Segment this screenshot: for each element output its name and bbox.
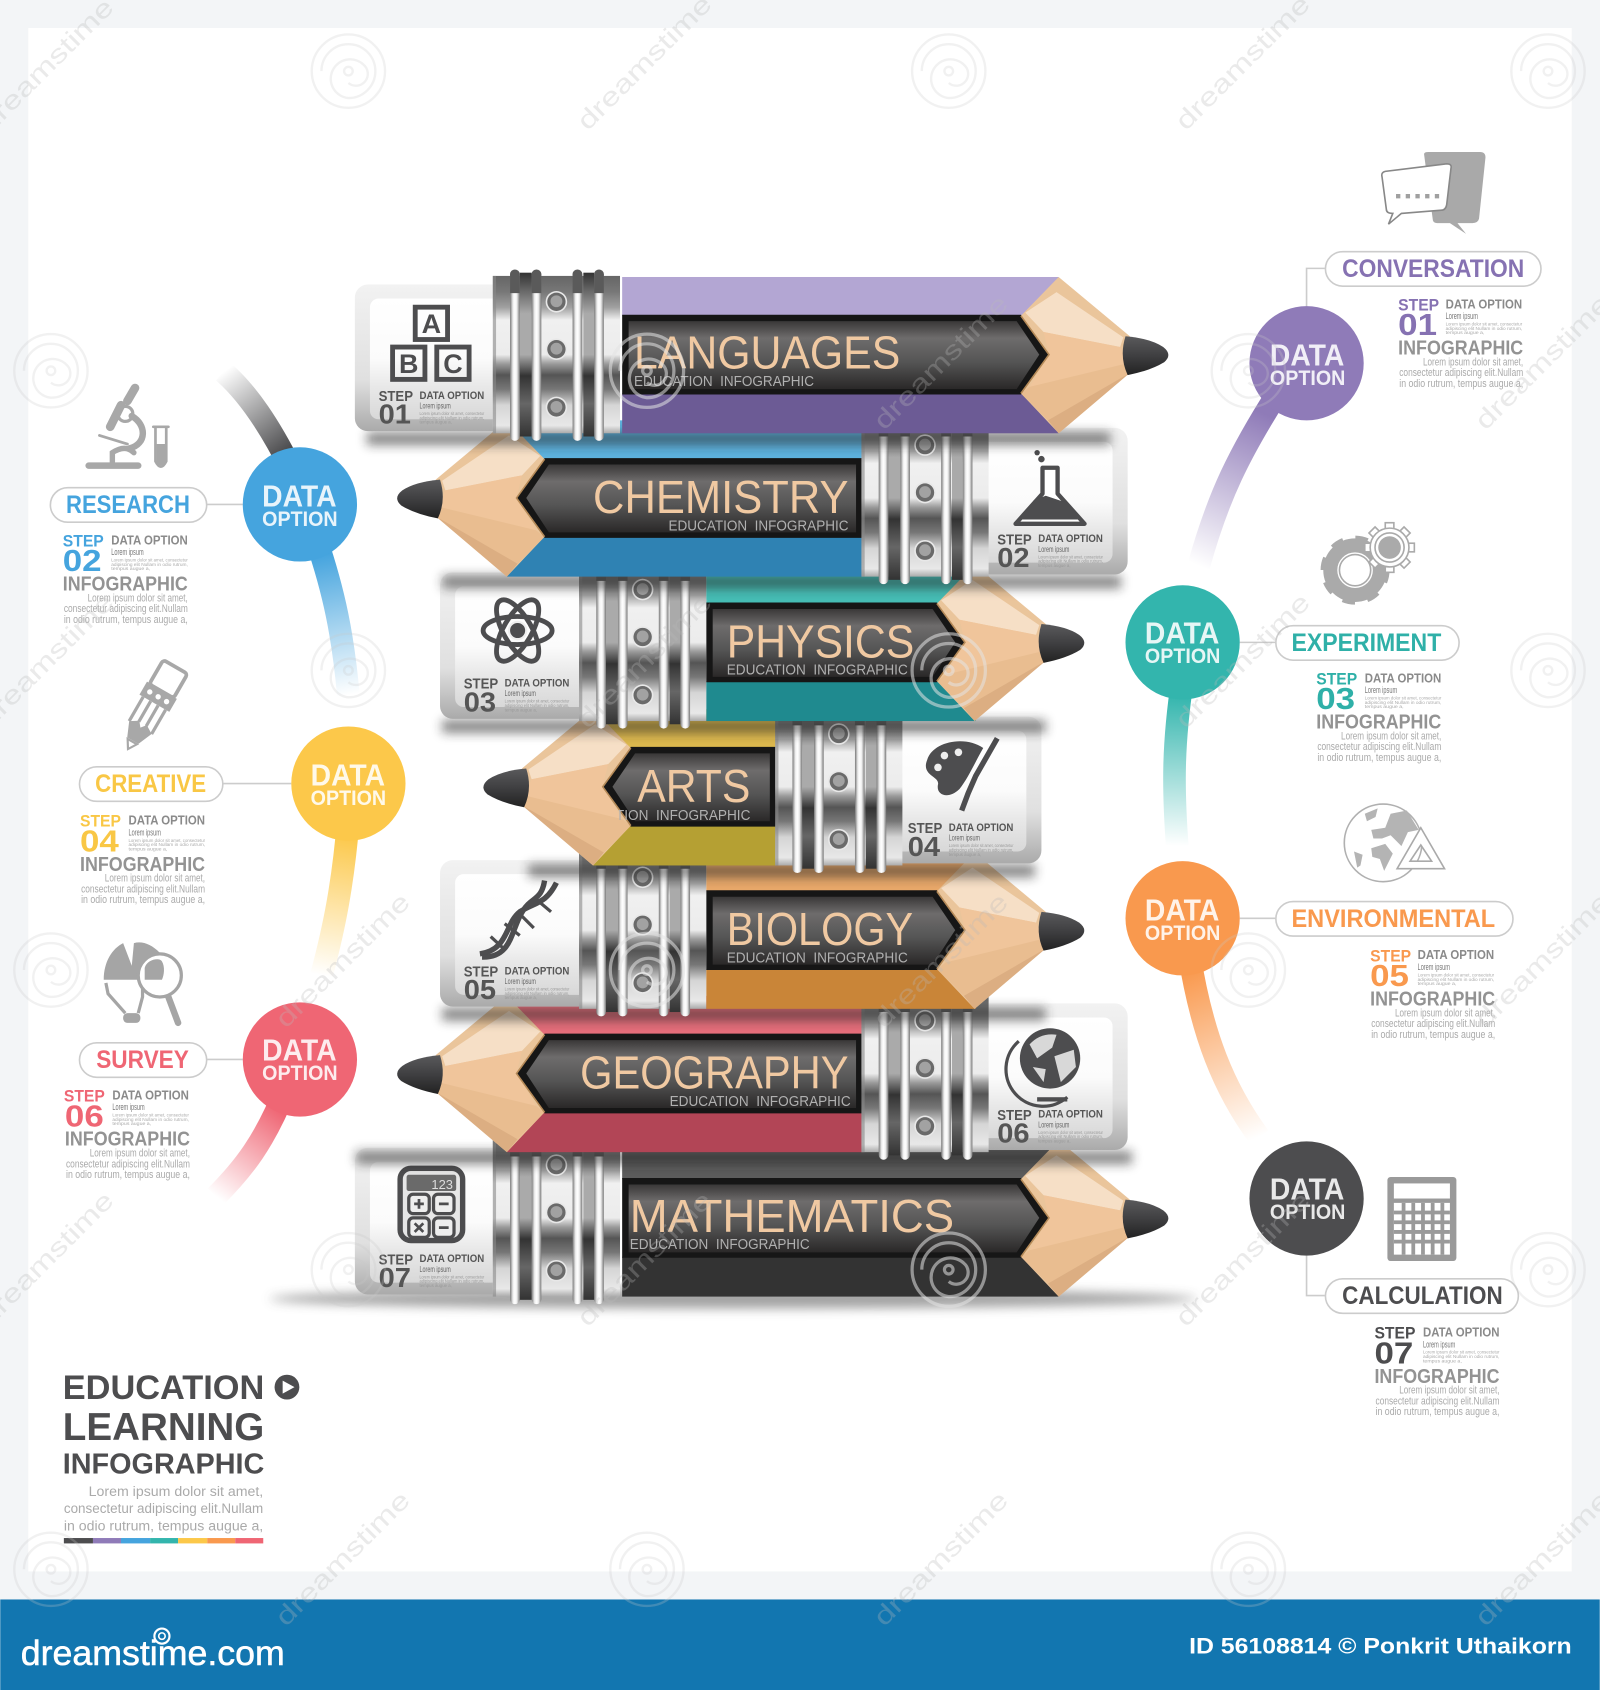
step label 01: 01: [379, 399, 411, 430]
step label 07: 07: [379, 1262, 411, 1293]
callout 02: research: DATA OPTION: [111, 532, 188, 547]
callout 05: environmental: adipiscing elit Nullam in odio rutrum,: [1418, 977, 1494, 983]
icon: pencil: [113, 658, 190, 758]
callout 03: experiment: Lorem ipsum: [1365, 685, 1397, 695]
subtitle: EDUCATION INFOGRAPHIC: [727, 949, 908, 966]
icon: abc blocks: A: [422, 309, 441, 339]
callout 03: experiment: Lorem ipsum dolor sit amet, consectetur: [1365, 695, 1442, 701]
watermark spirals and diagonal marks: dreamstime: [1170, 0, 1316, 136]
callout 02: research: Lorem ipsum dolor sit amet, consectetur: [111, 558, 188, 564]
callout 01: conversation: OPTION: [1270, 365, 1345, 390]
pencil 7: mathematics: [355, 1133, 1168, 1304]
callout 06: survey: SURVEY: [96, 1047, 189, 1074]
subtitle: EDUCATION INFOGRAPHIC: [634, 373, 814, 390]
icon: abc blocks: C: [443, 349, 463, 379]
callout 03: experiment: tempus augue a,: [1365, 704, 1404, 710]
callout 03: experiment: STEP: [1316, 670, 1357, 688]
step label 05: [464, 964, 570, 1005]
callout 04: creative: OPTION: [311, 785, 386, 810]
pencil 6: geography: [356, 988, 1132, 1164]
callout 05: environmental: OPTION: [1145, 920, 1220, 945]
step label 02: DATA OPTION: [1038, 533, 1103, 545]
callout 03: experiment: EXPERIMENT: [1291, 630, 1441, 657]
callout 06: survey: [64, 1002, 357, 1181]
callout 06: survey: adipiscing elit Nullam in odio rutrum,: [112, 1117, 189, 1123]
watermark spirals and diagonal marks: dreamstime: [572, 1187, 718, 1332]
callout 04: creative: STEP: [80, 813, 121, 831]
subtitle: EDUCATION INFOGRAPHIC: [630, 1236, 810, 1253]
watermark spirals and diagonal marks: dreamstime: [1470, 290, 1600, 435]
step label 01: [379, 389, 485, 430]
step label 03: DATA OPTION: [505, 678, 569, 690]
callout 07: calculation: DATA OPTION: [1423, 1324, 1499, 1339]
callout 07: calculation: Lorem ipsum: [1423, 1339, 1456, 1349]
watermark spirals and diagonal marks: dreamstime: [1170, 588, 1316, 734]
callout 07: calculation: DATA: [1270, 1174, 1344, 1207]
pencil 5: biology: [440, 845, 1084, 1021]
callout 04: creative: 04: [80, 825, 119, 858]
watermark spirals and diagonal marks: dreamstime: [1170, 1187, 1316, 1332]
title: mathematics: MATHEMATICS: [630, 1190, 954, 1242]
footer credit: ID 56108814 © Ponkrit Uthaikorn: [1189, 1633, 1572, 1658]
step label 03: [464, 677, 570, 717]
heading block: INFOGRAPHIC: [63, 1448, 264, 1480]
callout 07: calculation: OPTION: [1270, 1199, 1345, 1224]
step label 07: [379, 1252, 485, 1293]
callout 02: research: RESEARCH: [66, 492, 190, 519]
step label 01: adipiscing elit Nullam in odio rutrum,: [420, 415, 484, 420]
title: chemistry: CHEMISTRY: [593, 471, 849, 523]
icon: calculator on eraser: 123: [431, 1177, 453, 1192]
step label 01: Lorem ipsum dolor sit amet, consectetur: [420, 411, 485, 416]
subtitle: EDUCATION INFOGRAPHIC: [670, 1093, 851, 1110]
step label 03: STEP: [464, 677, 498, 693]
callout 04: creative: DATA: [311, 760, 385, 793]
step label 05: DATA OPTION: [505, 965, 569, 977]
step label 06: tempus augue a,: [1038, 1138, 1071, 1143]
callout 02: research: Lorem ipsum: [111, 547, 144, 557]
callout 01: conversation: consectetur adipiscing elit.Nullam: [1399, 367, 1523, 379]
title: arts: ARTS: [637, 760, 750, 812]
step label 06: 06: [997, 1117, 1030, 1148]
callout 02: research: STEP: [63, 532, 104, 550]
callout 01: conversation: DATA OPTION: [1446, 296, 1522, 311]
icon: speech bubbles: [1382, 152, 1485, 234]
callout 03: experiment: [1125, 585, 1459, 764]
callout 04: creative: Lorem ipsum dolor sit amet, consectetur: [129, 838, 205, 844]
step label 02: Lorem ipsum dolor sit amet, consectetur: [1038, 554, 1103, 559]
icon: play button: [275, 1375, 299, 1400]
step label 05: 05: [464, 974, 496, 1005]
callout 07: calculation: tempus augue a,: [1423, 1358, 1462, 1364]
step label 06: DATA OPTION: [1038, 1109, 1103, 1121]
step label 06: Lorem ipsum: [1038, 1120, 1070, 1129]
icon: abc blocks: [393, 307, 469, 379]
callout 07: calculation: [1249, 1141, 1518, 1418]
callout 04: creative: Lorem ipsum: [129, 827, 161, 837]
icon: gears: [1325, 523, 1414, 600]
step label 03: Lorem ipsum dolor sit amet, consectetur: [505, 699, 570, 704]
callout 02: research: INFOGRAPHIC: [63, 573, 188, 596]
title: physics: PHYSICS: [727, 615, 914, 667]
callout 06: survey: in odio rutrum, tempus augue a,: [66, 1169, 190, 1181]
step label 06: Lorem ipsum dolor sit amet, consectetur: [1038, 1130, 1103, 1135]
pencil 3: physics: [440, 557, 1084, 733]
heading block: [63, 1369, 264, 1533]
callout 05: environmental: DATA OPTION: [1418, 947, 1494, 962]
colour strip: [64, 1538, 263, 1543]
subtitle: EDUCATION INFOGRAPHIC: [669, 517, 849, 534]
icon: desk globe: [1006, 1028, 1080, 1106]
heading block: Lorem ipsum dolor sit amet,: [89, 1484, 263, 1499]
step label 05: Lorem ipsum: [505, 977, 536, 986]
callout 01: conversation: DATA: [1270, 339, 1344, 372]
callout 06: survey: DATA: [262, 1035, 337, 1068]
callout 01: conversation: [1249, 252, 1541, 420]
callout 05: environmental: consectetur adipiscing elit.Nullam: [1371, 1018, 1495, 1030]
callout 05: environmental: tempus augue a,: [1418, 981, 1456, 987]
callout 03: experiment: Lorem ipsum dolor sit amet,: [1341, 730, 1441, 742]
step label 02: [997, 532, 1103, 573]
callout 05: environmental: 05: [1370, 960, 1409, 993]
pencil 2: chemistry: [397, 413, 1128, 588]
step label 02: 02: [997, 542, 1030, 573]
watermark spirals and diagonal marks: dreamstime: [869, 888, 1014, 1034]
callout 06: survey: 06: [65, 1100, 104, 1133]
step label 06: STEP: [997, 1108, 1032, 1124]
icon: calculator: [1387, 1177, 1456, 1261]
step label 02: Lorem ipsum: [1038, 545, 1070, 554]
watermark spirals and diagonal marks: dreamstime: [1470, 888, 1600, 1034]
callout 07: calculation: STEP: [1374, 1325, 1416, 1343]
callout 04: creative: Lorem ipsum dolor sit amet,: [105, 873, 205, 885]
callout 04: creative: INFOGRAPHIC: [80, 853, 205, 876]
step label 05: Lorem ipsum dolor sit amet, consectetur: [505, 987, 570, 992]
heading block: consectetur adipiscing elit.Nullam: [64, 1501, 263, 1516]
callout 01: conversation: adipiscing elit Nullam in odio rutrum,: [1446, 326, 1522, 332]
step label 02: STEP: [997, 532, 1032, 548]
callout 01: conversation: Lorem ipsum dolor sit amet, consectetur: [1446, 321, 1522, 327]
step label 06: [997, 1108, 1103, 1148]
timeline tails: [216, 372, 1277, 1196]
step label 01: Lorem ipsum: [420, 401, 451, 410]
callout 03: experiment: 03: [1316, 683, 1355, 716]
callout 05: environmental: Lorem ipsum dolor sit amet,: [1395, 1007, 1495, 1019]
pencil 4: arts: [483, 702, 1041, 877]
step label 04: DATA OPTION: [949, 822, 1013, 834]
callout 05: environmental: DATA: [1145, 894, 1219, 927]
heading block: LEARNING: [63, 1406, 264, 1449]
heading block: in odio rutrum, tempus augue a,: [64, 1518, 263, 1533]
step label 03: tempus augue a,: [505, 707, 537, 712]
callout 04: creative: consectetur adipiscing elit.Nullam: [81, 883, 205, 895]
step label 01: tempus augue a,: [420, 420, 452, 425]
callout 04: creative: in odio rutrum, tempus augue a,: [81, 894, 205, 906]
callout 02: research: Lorem ipsum dolor sit amet,: [88, 592, 188, 604]
callout 06: survey: Lorem ipsum dolor sit amet,: [90, 1147, 190, 1159]
step label 07: Lorem ipsum dolor sit amet, consectetur: [420, 1274, 485, 1279]
icon: atom: [483, 594, 552, 667]
step label 02: tempus augue a,: [1038, 563, 1071, 568]
callout 07: calculation: in odio rutrum, tempus augue a,: [1376, 1406, 1499, 1418]
callout 05: environmental: ENVIRONMENTAL: [1291, 906, 1495, 933]
step label 05: STEP: [464, 964, 498, 980]
watermark spirals and diagonal marks: dreamstime: [869, 1486, 1014, 1632]
callout 05: environmental: [1125, 861, 1513, 1041]
step label 06: adipiscing elit Nullam in odio rutrum,: [1038, 1134, 1103, 1139]
callout 02: research: in odio rutrum, tempus augue a,: [64, 614, 188, 626]
callout 01: conversation: tempus augue a,: [1446, 330, 1484, 336]
callout 02: research: adipiscing elit Nullam in odio rutrum,: [111, 562, 188, 568]
step label 03: adipiscing elit Nullam in odio rutrum,: [505, 703, 569, 708]
callout 01: conversation: STEP: [1398, 296, 1439, 314]
heading block: EDUCATION: [63, 1369, 264, 1407]
footer logo: dreamstime.com: [21, 1633, 285, 1673]
callout 06: survey: DATA OPTION: [112, 1087, 189, 1102]
callout 07: calculation: consectetur adipiscing elit.Nullam: [1376, 1395, 1499, 1407]
title: languages: LANGUAGES: [634, 327, 900, 379]
step label 04: Lorem ipsum dolor sit amet, consectetur: [949, 843, 1014, 848]
icon: abc blocks: B: [399, 349, 418, 379]
subtitle: EDUCATION INFOGRAPHIC: [727, 662, 908, 679]
callout 07: calculation: adipiscing elit Nullam in odio rutrum,: [1423, 1354, 1499, 1360]
watermark spirals and diagonal marks: dreamstime: [572, 0, 718, 136]
callout 04: creative: adipiscing elit Nullam in odio rutrum,: [129, 842, 205, 848]
callout 07: calculation: 07: [1374, 1337, 1413, 1370]
icon: flask: [1016, 450, 1085, 524]
step label 04: [908, 821, 1014, 862]
icon: paint palette: [926, 738, 997, 811]
watermark spirals and diagonal marks: dreamstime: [270, 888, 416, 1034]
watermark spirals and diagonal marks: dreamstime: [572, 588, 718, 734]
pencil 1: languages: [355, 269, 1168, 445]
callout 06: survey: INFOGRAPHIC: [65, 1128, 190, 1151]
callout 05: environmental: STEP: [1370, 947, 1411, 965]
callout 01: conversation: INFOGRAPHIC: [1398, 337, 1523, 360]
callout 03: experiment: consectetur adipiscing elit.Nullam: [1317, 741, 1441, 753]
callout 03: experiment: INFOGRAPHIC: [1316, 711, 1441, 734]
callout 06: survey: consectetur adipiscing elit.Nullam: [66, 1158, 190, 1170]
callout 02: research: OPTION: [262, 506, 338, 531]
step label 07: tempus augue a,: [420, 1283, 452, 1288]
step label 04: adipiscing elit Nullam in odio rutrum,: [949, 847, 1013, 852]
callout 01: conversation: CONVERSATION: [1342, 256, 1524, 283]
callout 01: conversation: 01: [1398, 309, 1437, 342]
callout 04: creative: CREATIVE: [95, 771, 206, 798]
step label 03: 03: [464, 686, 496, 717]
callout 06: survey: STEP: [64, 1088, 105, 1106]
watermark spirals and diagonal marks: dreamstime: [869, 290, 1014, 435]
callout 03: experiment: OPTION: [1145, 643, 1220, 668]
callout 03: experiment: DATA: [1145, 617, 1219, 650]
step label 07: Lorem ipsum: [420, 1265, 451, 1274]
step label 02: adipiscing elit Nullam in odio rutrum,: [1038, 559, 1103, 564]
icon: microscope and test tube: [89, 388, 168, 467]
callout 04: creative: DATA OPTION: [129, 813, 205, 828]
callout 05: environmental: Lorem ipsum: [1418, 962, 1450, 972]
watermark spirals and diagonal marks: dreamstime: [270, 1486, 416, 1632]
callout 07: calculation: Lorem ipsum dolor sit amet,: [1399, 1385, 1499, 1397]
callout 02: research: [50, 447, 357, 626]
callout 03: experiment: in odio rutrum, tempus augue a,: [1317, 752, 1441, 764]
step label 07: adipiscing elit Nullam in odio rutrum,: [420, 1279, 484, 1284]
step label 05: adipiscing elit Nullam in odio rutrum,: [505, 991, 569, 996]
icon: helmet and magnifier: [104, 942, 181, 1023]
callout 03: experiment: adipiscing elit Nullam in odio rutrum,: [1365, 700, 1441, 706]
step label 07: STEP: [379, 1252, 413, 1268]
callout 02: research: 02: [63, 545, 102, 578]
step label 04: tempus augue a,: [949, 852, 981, 857]
callout 02: research: DATA: [262, 481, 337, 514]
callout 02: research: consectetur adipiscing elit.Nullam: [64, 603, 188, 615]
callout 07: calculation: CALCULATION: [1342, 1283, 1503, 1310]
callout 05: environmental: Lorem ipsum dolor sit amet, consectetur: [1418, 972, 1494, 978]
callout 06: survey: Lorem ipsum dolor sit amet, consectetur: [112, 1113, 189, 1119]
callout 07: calculation: Lorem ipsum dolor sit amet, consectetur: [1423, 1350, 1500, 1356]
icon: calculator on eraser: [400, 1168, 463, 1241]
step label 04: Lorem ipsum: [949, 834, 980, 843]
watermark spirals and diagonal marks: dreamstime: [1470, 1486, 1600, 1632]
callout 05: environmental: in odio rutrum, tempus augue a,: [1371, 1029, 1495, 1041]
step label 01: DATA OPTION: [420, 390, 484, 402]
icon: globe with recycling arrows: [1344, 804, 1445, 882]
callout 01: conversation: Lorem ipsum: [1446, 311, 1478, 321]
step label 05: tempus augue a,: [505, 995, 537, 1000]
step label 07: DATA OPTION: [420, 1253, 484, 1265]
icon: dna helix: [480, 881, 556, 957]
step label 01: STEP: [379, 389, 413, 405]
subtitle: arts (clipped): EDUCATION INFOGRAPHIC: [569, 807, 751, 824]
title: biology: BIOLOGY: [727, 903, 913, 955]
callout 04: creative: [79, 726, 406, 906]
callout 06: survey: tempus augue a,: [112, 1121, 151, 1127]
callout 07: calculation: INFOGRAPHIC: [1374, 1365, 1500, 1388]
callout 03: experiment: DATA OPTION: [1365, 670, 1441, 685]
callout 02: research: tempus augue a,: [111, 566, 150, 572]
callout 06: survey: Lorem ipsum: [112, 1102, 145, 1112]
callout 06: survey: OPTION: [262, 1060, 338, 1085]
floor shadow under the pencil stack: [270, 1289, 1197, 1308]
title: geography: GEOGRAPHY: [580, 1047, 849, 1099]
step label 04: STEP: [908, 821, 943, 837]
callout 04: creative: tempus augue a,: [129, 846, 167, 852]
footer bar: [0, 1599, 1600, 1690]
callout 05: environmental: INFOGRAPHIC: [1370, 988, 1495, 1011]
step label 04: 04: [908, 831, 941, 862]
callout 01: conversation: Lorem ipsum dolor sit amet,: [1423, 356, 1523, 368]
step label 03: Lorem ipsum: [505, 689, 536, 698]
callout 01: conversation: in odio rutrum, tempus augue a,: [1399, 378, 1523, 390]
